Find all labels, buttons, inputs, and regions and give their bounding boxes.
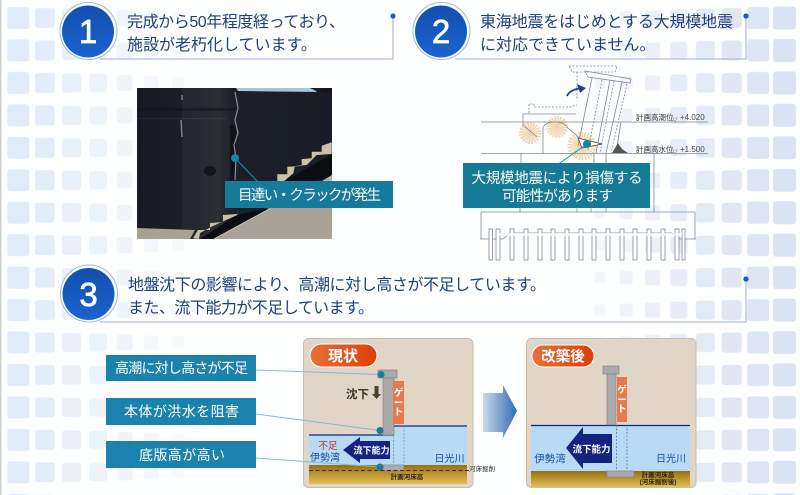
heading text 1 line 2: 施設が老朽化しています。	[127, 36, 317, 54]
upper stair	[277, 142, 332, 182]
big arrow	[483, 385, 517, 438]
gate	[393, 381, 404, 424]
flow arrow: 流下能力	[572, 444, 611, 456]
label: height	[106, 355, 256, 381]
level mark: high water	[673, 150, 677, 154]
black rubble	[578, 138, 602, 148]
gate: ト	[617, 404, 627, 415]
ground right	[213, 208, 332, 239]
footing band	[497, 233, 682, 236]
badge 1: 1	[79, 13, 97, 50]
heading text 3: 地盤沈下の影響により、高潮に対し高さが不足しています。	[128, 276, 546, 294]
diagram: earthquake damage section	[480, 66, 708, 260]
label: obstruct: 本体が洪水を阻害	[124, 404, 239, 420]
callout: crack: 目達い・クラックが発生	[238, 187, 381, 204]
pill: after: 改築後	[541, 348, 585, 366]
flow arrow	[343, 437, 390, 463]
levee structure	[480, 104, 708, 239]
callout: crack	[225, 154, 393, 208]
heading text 3 line 2: また、流下能力が不足しています。	[128, 299, 374, 317]
bay name: 伊勢湾	[534, 452, 566, 465]
gate	[617, 377, 627, 422]
flow arrow: 流下能力	[353, 444, 390, 456]
problem labels	[106, 355, 256, 468]
ground	[531, 471, 690, 487]
badge 1	[60, 2, 117, 60]
heading text 2: 東海地震をはじめとする大規模地震	[480, 13, 733, 31]
pill: after	[532, 345, 594, 367]
photo: cracked concrete wall	[137, 88, 332, 239]
structure	[378, 370, 404, 471]
water	[531, 425, 690, 471]
flow arrow	[566, 427, 612, 469]
dredge label: 河床掘削	[469, 464, 495, 473]
panel: after reconstruction	[526, 338, 696, 488]
label: base	[106, 441, 256, 468]
gate: ゲ	[617, 384, 627, 396]
bed label: 計画河床高	[642, 470, 675, 479]
upper stair shadow	[283, 154, 332, 182]
badge 3	[60, 265, 118, 322]
panel: current state	[304, 338, 495, 488]
label: obstruct	[106, 398, 256, 425]
settlement label: 沈下	[346, 387, 369, 401]
level value: high tide: +4.020	[680, 113, 705, 122]
ground left	[137, 228, 195, 239]
rotation arrow	[567, 88, 583, 96]
bay name: 伊勢湾	[310, 451, 340, 464]
heading text 1: 完成から50年程度経っており、	[127, 13, 345, 31]
damage bursts	[519, 116, 596, 160]
ground	[309, 465, 467, 484]
heading text 2 line 2: に対応できていません。	[480, 36, 656, 54]
tilted wall	[569, 66, 631, 153]
section 3 heading	[60, 265, 749, 322]
structure	[603, 366, 634, 477]
level value: high water: +1.500	[680, 145, 705, 154]
label: base: 底版高が高い	[139, 447, 225, 463]
lower stair shadow	[200, 208, 270, 239]
settlement arrow	[372, 386, 381, 399]
level label: high tide: 計画高潮位	[636, 112, 674, 122]
bed label sub: (河床掘削後)	[640, 477, 676, 486]
badge 2	[413, 2, 470, 60]
gate: ゲ	[394, 387, 404, 399]
gate: ー	[617, 395, 627, 406]
callout: earthquake damage: 大規模地震により損傷する	[472, 170, 642, 187]
river name: 日光川	[656, 452, 686, 465]
bed label: 計画河床高	[391, 472, 424, 481]
crack	[234, 92, 238, 180]
gate dotted lines	[616, 425, 627, 471]
pill: current: 現状	[328, 347, 358, 365]
badge 3: 3	[79, 276, 98, 313]
piles	[489, 229, 685, 260]
lower stair	[193, 209, 237, 239]
dashed bed line	[309, 470, 470, 472]
callout: earthquake damage: 可能性があります	[502, 188, 613, 205]
level label: high water: 計画高水位	[636, 144, 674, 154]
callout: earthquake damage	[463, 140, 650, 208]
section 1 heading	[60, 2, 396, 60]
gate: ト	[394, 407, 403, 418]
pill: current	[310, 344, 377, 367]
level mark: high tide	[673, 118, 677, 122]
badge 2: 2	[432, 13, 450, 50]
gate dotted lines	[394, 426, 404, 465]
leader lines and marker dots	[256, 370, 384, 470]
gate: ー	[394, 398, 403, 409]
shortage text: 不足	[318, 441, 338, 452]
section 2 heading	[413, 2, 749, 60]
label: height: 高潮に対し高さが不足	[115, 360, 248, 376]
river name: 日光川	[434, 452, 464, 465]
water	[309, 426, 467, 465]
